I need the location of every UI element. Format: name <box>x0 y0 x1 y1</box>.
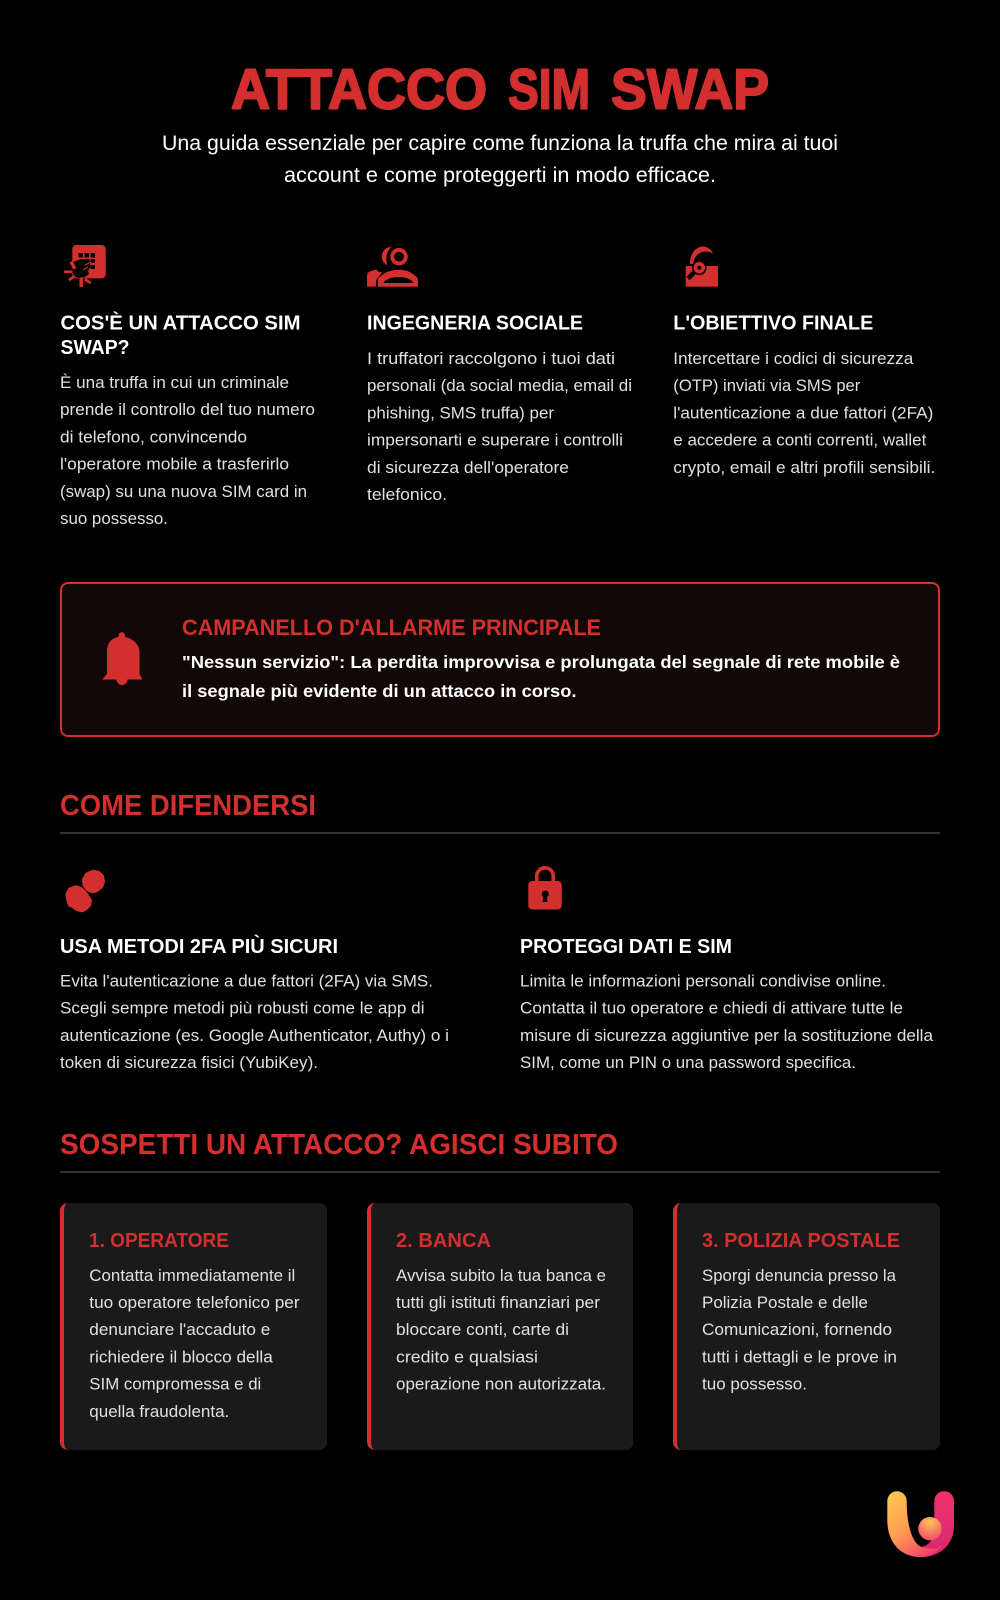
alarm text: "Nessun servizio": La perdita improvvisa e prolungata del segnale di rete mobile è <box>182 652 900 672</box>
card text: Comunicazioni, fornendo <box>702 1321 892 1339</box>
text block <box>60 373 315 528</box>
panel: proteggi dati e sim <box>520 868 934 1072</box>
panel: 3. polizia postale <box>673 1203 940 1450</box>
alarm text: il segnale più evidente di un attacco in corso. <box>182 681 576 701</box>
card title: 2. BANCA <box>396 1230 491 1252</box>
panel: 1. operatore <box>60 1203 327 1450</box>
text block: token di sicurezza fisici (YubiKey). <box>60 1054 318 1072</box>
card text <box>702 1267 897 1394</box>
text block: l'operatore mobile a trasferirlo <box>60 456 289 474</box>
text block: I truffatori raccolgono i tuoi dati <box>367 350 615 368</box>
heading: L'OBIETTIVO FINALE <box>673 312 873 334</box>
card text: Contatta immediatamente il <box>89 1267 295 1285</box>
title: SWAP <box>611 58 769 122</box>
icon: padlock <box>528 868 562 910</box>
subtitle <box>162 132 838 187</box>
text block: Contatta il tuo operatore e chiedi di attivare tutte le <box>520 1000 903 1018</box>
title <box>231 58 769 122</box>
text block <box>673 350 935 477</box>
alarm text <box>182 652 900 701</box>
text block: Intercettare i codici di sicurezza <box>673 350 914 368</box>
section heading: sospetti un attacco: SOSPETTI UN ATTACCO? AGISCI SUBITO <box>60 1129 618 1161</box>
logo <box>887 1491 954 1557</box>
text block: misure di sicurezza aggiuntive per la sostituzione della <box>520 1027 934 1045</box>
card text: tutti i dettagli e le prove in <box>702 1348 897 1366</box>
card text: richiedere il blocco della <box>89 1348 274 1366</box>
text block: personali (da social media, email di <box>367 377 632 395</box>
text block <box>520 972 934 1072</box>
text block: Evita l'autenticazione a due fattori (2FA) via SMS. <box>60 972 433 990</box>
title: SIM <box>508 58 590 122</box>
panel: l'obiettivo finale <box>673 246 935 477</box>
text block: (OTP) inviati via SMS per <box>673 377 861 395</box>
card text: SIM compromessa e di <box>89 1376 261 1394</box>
card text: credito e qualsiasi <box>396 1348 538 1366</box>
heading: USA METODI 2FA PIÙ SICURI <box>60 934 338 958</box>
text block: phishing, SMS truffa) per <box>367 404 555 422</box>
card text: Polizia Postale e delle <box>702 1294 868 1312</box>
text block: impersonarti e superare i controlli <box>367 432 623 450</box>
text block: Limita le informazioni personali condivise online. <box>520 972 886 990</box>
text block: telefonico. <box>367 486 447 504</box>
text block: SIM, come un PIN o una password specifica. <box>520 1054 856 1072</box>
card text: Avvisa subito la tua banca e <box>396 1267 606 1285</box>
section heading: come difendersi: COME DIFENDERSI <box>60 790 316 822</box>
heading: PROTEGGI DATI E SIM <box>520 936 732 958</box>
panel: usa metodi 2fa <box>60 870 449 1072</box>
text block: di sicurezza dell'operatore <box>367 459 569 477</box>
icon: sim card with burst <box>64 245 106 287</box>
subtitle: Una guida essenziale per capire come funziona la truffa che mira ai tuoi <box>162 132 838 155</box>
text block: e accedere a conti correnti, wallet <box>673 432 927 450</box>
card text: tuo operatore telefonico per <box>89 1294 300 1312</box>
icon: social engineering person <box>367 247 418 287</box>
card text: Sporgi denuncia presso la <box>702 1267 897 1285</box>
card text: operazione non autorizzata. <box>396 1376 606 1394</box>
icon: open lock with key <box>686 246 718 287</box>
text block: prende il controllo del tuo numero <box>60 401 315 419</box>
card text <box>89 1267 300 1421</box>
panel: 2. banca <box>367 1203 633 1450</box>
text block: di telefono, convincendo <box>60 428 247 446</box>
card title: 3. POLIZIA POSTALE <box>702 1230 900 1252</box>
heading <box>60 312 300 359</box>
text block: crypto, email e altri profili sensibili. <box>673 459 935 477</box>
icon: chain link <box>66 870 105 912</box>
text block <box>367 350 632 504</box>
text block: suo possesso. <box>60 510 168 528</box>
icon: bell <box>102 632 142 685</box>
panel: ingegneria sociale <box>367 247 632 504</box>
text block: È una truffa in cui un criminale <box>60 373 289 392</box>
text block: Scegli sempre metodi più robusti come le app di <box>60 1000 424 1018</box>
card text: bloccare conti, carte di <box>396 1321 569 1339</box>
alarm heading: CAMPANELLO D'ALLARME PRINCIPALE <box>182 615 601 640</box>
text block <box>60 972 449 1072</box>
title: ATTACCO <box>231 58 487 122</box>
panel: campanello d'allarme <box>61 583 939 736</box>
card text: tuo possesso. <box>702 1376 807 1394</box>
card text <box>396 1267 606 1394</box>
heading: COS'È UN ATTACCO SIM <box>60 312 300 334</box>
heading: SWAP? <box>60 337 130 359</box>
card title: 1. OPERATORE <box>89 1230 229 1252</box>
card text: quella fraudolenta. <box>89 1403 229 1421</box>
text block: l'autenticazione a due fattori (2FA) <box>673 404 933 422</box>
card text: denunciare l'accaduto e <box>89 1321 270 1339</box>
text block: autenticazione (es. Google Authenticator, Authy) o i <box>60 1027 449 1045</box>
heading: INGEGNERIA SOCIALE <box>367 312 583 334</box>
panel: cos'è un attacco sim swap <box>60 245 315 528</box>
text block: (swap) su una nuova SIM card in <box>60 483 307 501</box>
subtitle: account e come proteggerti in modo efficace. <box>284 164 716 187</box>
card text: tutti gli istituti finanziari per <box>396 1294 601 1312</box>
